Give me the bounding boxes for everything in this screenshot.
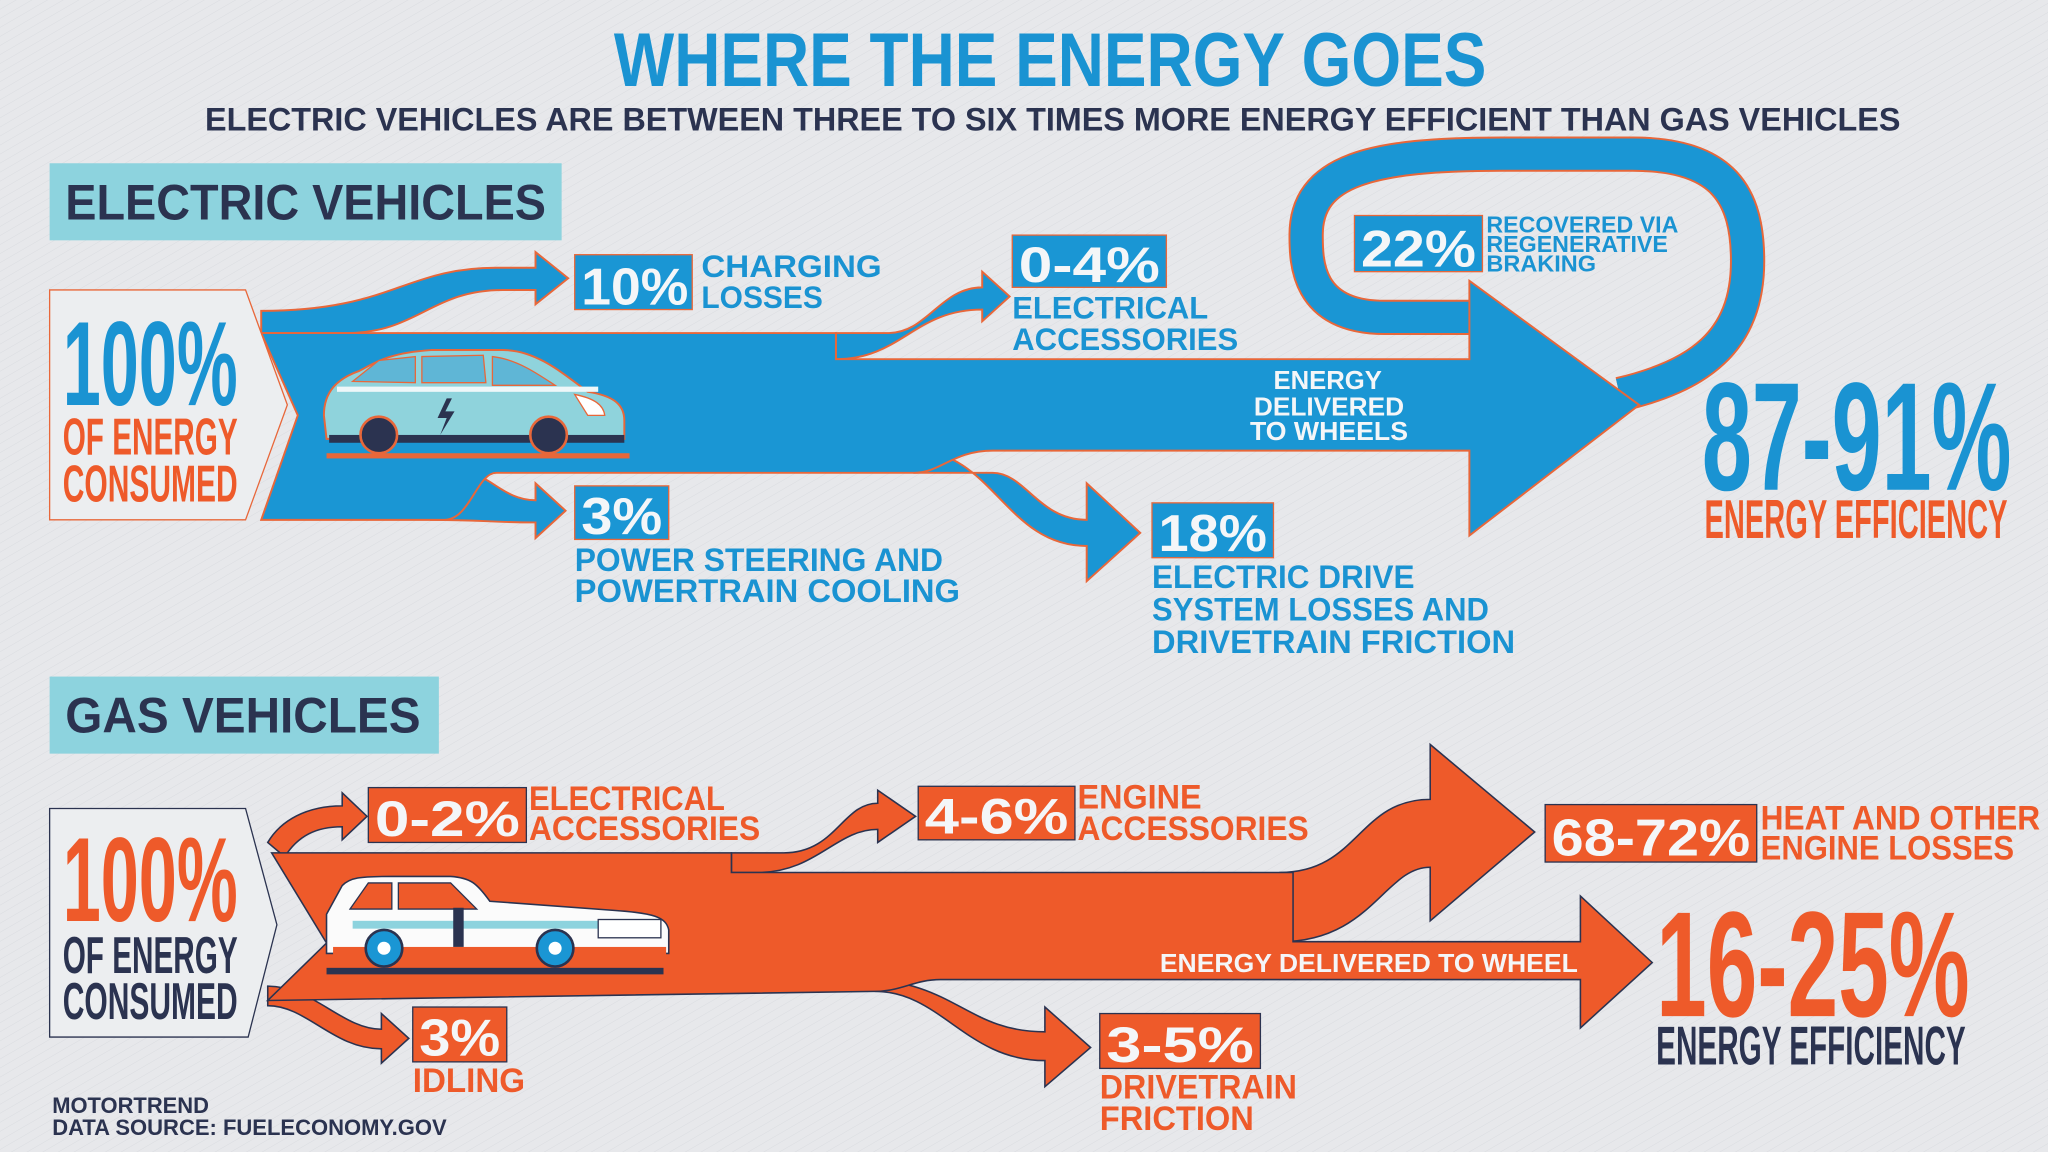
label: energy delivered to wheels xyxy=(1250,365,1408,446)
gas energy flow xyxy=(268,744,1652,1087)
ev energy flow xyxy=(261,154,1748,581)
arrow: idling xyxy=(268,986,409,1063)
label: 18% drive system losses: ELECTRIC DRIVE xyxy=(1152,558,1415,595)
label: 3-5% drivetrain friction: 3-5% xyxy=(1106,1017,1254,1073)
icon: gas car xyxy=(327,876,669,974)
label: 0-4% electrical accessories: ELECTRICAL xyxy=(1012,291,1208,326)
label: 3% power steering: POWERTRAIN COOLING xyxy=(575,572,960,609)
label: 68-72% heat and other engine losses: 68-72% xyxy=(1552,810,1750,868)
label: 18% drive system losses xyxy=(1152,503,1515,660)
arrow: drivetrain friction xyxy=(862,980,1091,1087)
arrow: energy delivered to wheel xyxy=(268,853,1652,1028)
box: 100% of energy consumed: OF ENERGY xyxy=(63,409,238,467)
label: energy delivered to wheel: ENERGY DELIVERED TO WHEEL xyxy=(1160,948,1578,978)
label: 0-4% electrical accessories xyxy=(1012,235,1238,357)
label: 3% power steering: POWER STEERING AND xyxy=(575,541,943,578)
label: energy delivered to wheels: TO WHEELS xyxy=(1250,416,1408,446)
heading: electric vehicles xyxy=(50,163,562,240)
label: 10% charging losses: 10% xyxy=(581,258,688,316)
label: 10% charging losses: LOSSES xyxy=(701,280,823,315)
label: 0-2% electrical accessories xyxy=(368,780,760,848)
heading: gas vehicles: GAS VEHICLES xyxy=(65,688,421,744)
label: 22% regenerative braking: RECOVERED VIA xyxy=(1486,211,1678,237)
label: 0-4% electrical accessories: ACCESSORIES xyxy=(1012,322,1238,357)
arrow: power steering xyxy=(431,473,566,538)
label: 4-6% engine accessories xyxy=(918,778,1309,848)
loop: regenerative braking xyxy=(1306,154,1748,394)
label: 4-6% engine accessories: 4-6% xyxy=(925,788,1068,844)
arrow: electrical accessories xyxy=(268,793,367,857)
panel: electric vehicles xyxy=(50,154,2011,660)
source credit: DATA SOURCE: FUELECONOMY.GOV xyxy=(52,1115,447,1140)
label: 3-5% drivetrain friction: FRICTION xyxy=(1100,1100,1254,1138)
label: 18% drive system losses: DRIVETRAIN FRICTION xyxy=(1152,623,1515,660)
arrow: drive system losses xyxy=(914,451,1140,581)
source credit: MOTORTREND xyxy=(52,1093,209,1118)
label: 22% regenerative braking: 22% xyxy=(1361,220,1476,278)
subtitle: ELECTRIC VEHICLES ARE BETWEEN THREE TO SIX TIMES MORE ENERGY EFFICIENT THAN GAS VEHICLES xyxy=(205,101,1900,138)
arrow: heat and engine losses xyxy=(1280,744,1535,942)
label: 3% idling: 3% xyxy=(419,1009,500,1067)
label: 3-5% drivetrain friction xyxy=(1100,1014,1297,1138)
label: 0-2% electrical accessories: 0-2% xyxy=(375,791,520,847)
label: 3% power steering: 3% xyxy=(581,488,662,546)
heading: electric vehicles: ELECTRIC VEHICLES xyxy=(65,174,546,230)
box: 100% of energy consumed: 100% xyxy=(63,813,238,947)
box: 100% of energy consumed xyxy=(50,290,287,520)
label: 68-72% heat and other engine losses xyxy=(1545,799,2040,868)
panel: gas vehicles xyxy=(50,677,2040,1138)
label: 3% power steering xyxy=(575,486,960,609)
heading: gas vehicles xyxy=(50,677,439,754)
label: 22% regenerative braking: BRAKING xyxy=(1486,251,1596,277)
label: 18% drive system losses: 18% xyxy=(1159,505,1267,563)
label: 0-2% electrical accessories: ELECTRICAL xyxy=(529,780,725,818)
label: 3% idling: IDLING xyxy=(413,1062,525,1100)
label: 0-4% electrical accessories: 0-4% xyxy=(1019,237,1160,293)
icon: electric car xyxy=(324,350,630,458)
label: 4-6% engine accessories: ENGINE xyxy=(1078,778,1202,816)
box: 100% of energy consumed: 100% xyxy=(63,297,238,431)
label: energy delivered to wheels: DELIVERED xyxy=(1254,391,1404,421)
label: 10% charging losses: CHARGING xyxy=(701,249,882,284)
label: 10% charging losses xyxy=(575,249,882,316)
box: 100% of energy consumed xyxy=(50,808,277,1037)
source credit xyxy=(52,1093,447,1140)
label: energy delivered to wheels: ENERGY xyxy=(1273,365,1382,395)
arrow: energy delivered to wheels xyxy=(261,281,1639,536)
title: WHERE THE ENERGY GOES xyxy=(614,18,1486,103)
box: 100% of energy consumed: OF ENERGY xyxy=(63,927,238,985)
label: 22% regenerative braking xyxy=(1354,211,1678,278)
arrow: engine accessories xyxy=(731,790,916,872)
label: 3-5% drivetrain friction: DRIVETRAIN xyxy=(1100,1068,1297,1106)
arrow: electrical accessories xyxy=(836,272,1010,359)
label: 68-72% heat and other engine losses: ENGINE LOSSES xyxy=(1761,829,2014,867)
arrow: charging losses xyxy=(261,252,568,333)
label: 22% regenerative braking: REGENERATIVE xyxy=(1486,231,1668,257)
box: 100% of energy consumed: CONSUMED xyxy=(63,456,238,514)
label: 3% idling xyxy=(413,1007,525,1100)
label: 0-2% electrical accessories: ACCESSORIES xyxy=(529,810,760,848)
label: 4-6% engine accessories: ACCESSORIES xyxy=(1078,810,1309,848)
label: 18% drive system losses: SYSTEM LOSSES AND xyxy=(1152,590,1489,627)
box: 100% of energy consumed: CONSUMED xyxy=(63,973,238,1031)
